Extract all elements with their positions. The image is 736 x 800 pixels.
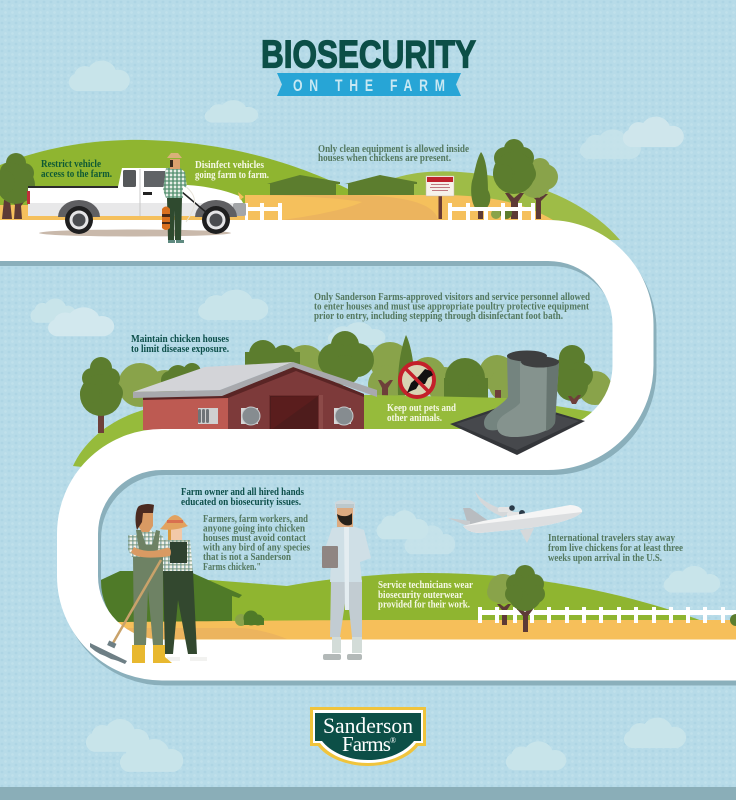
text: farmers and farm workers: that is not a Sanderson: [203, 552, 291, 563]
fence: [478, 607, 736, 623]
fans: [198, 407, 353, 425]
body: [28, 168, 246, 216]
hills: [0, 140, 350, 222]
tree front: [505, 565, 545, 632]
subtitle ribbon: ON THE FARM: [293, 77, 445, 96]
text: restrict vehicle: access to the farm.: [41, 169, 112, 180]
fuselage: [463, 505, 582, 533]
text: international travelers: weeks upon arrival in the U.S.: [548, 553, 662, 564]
text: maintain chicken houses: Maintain chicken houses: [131, 334, 229, 345]
text: service technicians: biosecurity outerwear: [378, 590, 463, 601]
near wing: [520, 528, 534, 543]
mat: [450, 401, 585, 455]
no pets sign: [400, 363, 434, 397]
text: service technicians: provided for their work.: [378, 600, 470, 610]
pickup truck: [27, 168, 246, 236]
text: farmers and farm workers: [203, 514, 310, 573]
text: international travelers: [548, 533, 683, 564]
hills: [90, 573, 705, 622]
text: international travelers: International travelers stay away: [548, 533, 676, 544]
hedge trees: [118, 342, 612, 410]
text: international travelers: from live chickens for at least three: [548, 543, 683, 554]
text: maintain chicken houses: to limit disease exposure.: [131, 344, 229, 355]
dark farm building: [90, 571, 242, 627]
back boot: [484, 355, 547, 430]
Sanderson Farms logo: ®: [390, 736, 396, 745]
yellow ground: [245, 195, 553, 220]
yellow road edge dashes: [37, 214, 187, 219]
woman: [160, 515, 207, 661]
text: service technicians: Service technicians wear: [378, 580, 473, 591]
trunks: [378, 380, 581, 404]
text: service technicians: [378, 580, 473, 610]
airplane: [448, 491, 582, 543]
text: farmers and farm workers: Farms chicken.": [203, 562, 261, 573]
farm couple with rake: [90, 504, 207, 664]
man: [128, 504, 172, 663]
text: maintain chicken houses: [131, 334, 229, 355]
windows: [123, 170, 136, 187]
text: disinfect vehicles: [195, 160, 269, 181]
bottom bar: [0, 787, 736, 800]
tree left: [0, 153, 35, 219]
Sanderson Farms logo: Sanderson: [323, 713, 413, 738]
text: restrict vehicle: Restrict vehicle: [41, 159, 101, 170]
head: [170, 159, 180, 169]
top farm landscape: [0, 139, 620, 240]
ground: [73, 395, 612, 470]
bush: [235, 610, 264, 626]
text: restrict vehicle: [41, 159, 112, 180]
wheels: [58, 200, 237, 234]
text: farmers and farm workers: with any bird of any species: [203, 542, 310, 554]
chicken houses: [267, 175, 417, 195]
text: disinfect vehicles: going farm to farm.: [195, 170, 269, 181]
text: approved visitors: [314, 292, 590, 322]
title: BIOSECURITY: [261, 34, 476, 76]
farmer with sprayer: [162, 153, 207, 243]
middle farm landscape: [73, 331, 612, 470]
engines: [498, 507, 513, 512]
Sanderson Farms logo: [310, 707, 426, 766]
Sanderson Farms logo: Farms: [342, 732, 390, 756]
text: clean equipment: houses when chickens are present.: [318, 153, 451, 164]
title: [261, 34, 476, 96]
pants: [167, 198, 182, 240]
ground band: [115, 620, 736, 640]
text: farm owner: Farm owner and all hired hands: [181, 487, 304, 498]
large trees right: [491, 139, 558, 219]
text: approved visitors: prior to entry, including stepping through disinfectant foot bath.: [314, 311, 563, 322]
text: farmers and farm workers: houses must avoid contact: [203, 533, 306, 544]
text: approved visitors: Only Sanderson Farms-approved visitors and service personnel allowed: [314, 292, 590, 303]
shadow: [39, 230, 231, 236]
tree left: [80, 357, 123, 433]
far wing: [475, 491, 512, 517]
text: farmers and farm workers: Farmers, farm workers, and: [203, 514, 308, 525]
text: keep out pets: Keep out pets and: [387, 403, 456, 414]
shirt: [163, 168, 187, 198]
text: farmers and farm workers: anyone going into chicken: [203, 524, 305, 534]
sprayer tank: [162, 206, 170, 230]
subtitle ribbon: [277, 73, 461, 96]
tail: [463, 508, 490, 532]
rubber boots on mat: [450, 350, 585, 455]
text: clean equipment: Only clean equipment is allowed inside: [318, 144, 469, 155]
rake: [90, 560, 161, 664]
warning sign: [426, 176, 454, 219]
text: keep out pets: [387, 403, 456, 424]
text: farm owner: [181, 487, 304, 508]
text: approved visitors: to enter houses and must use appropriate poultry protective equipment: [314, 302, 589, 312]
text: disinfect vehicles: Disinfect vehicles: [195, 160, 264, 171]
chicken house barn: [133, 362, 377, 430]
cypress tree: [471, 152, 490, 219]
technician in biosecurity suit: [322, 500, 371, 660]
lower farm landscape: [90, 565, 736, 640]
barn door: [269, 395, 323, 430]
front boot: [497, 363, 559, 437]
fence: [245, 203, 535, 220]
text: clean equipment: [318, 144, 469, 164]
road: [0, 240, 736, 665]
text: keep out pets: other animals.: [387, 413, 442, 424]
tree behind: [487, 574, 518, 625]
text: farm owner: educated on biosecurity issues.: [181, 497, 301, 508]
